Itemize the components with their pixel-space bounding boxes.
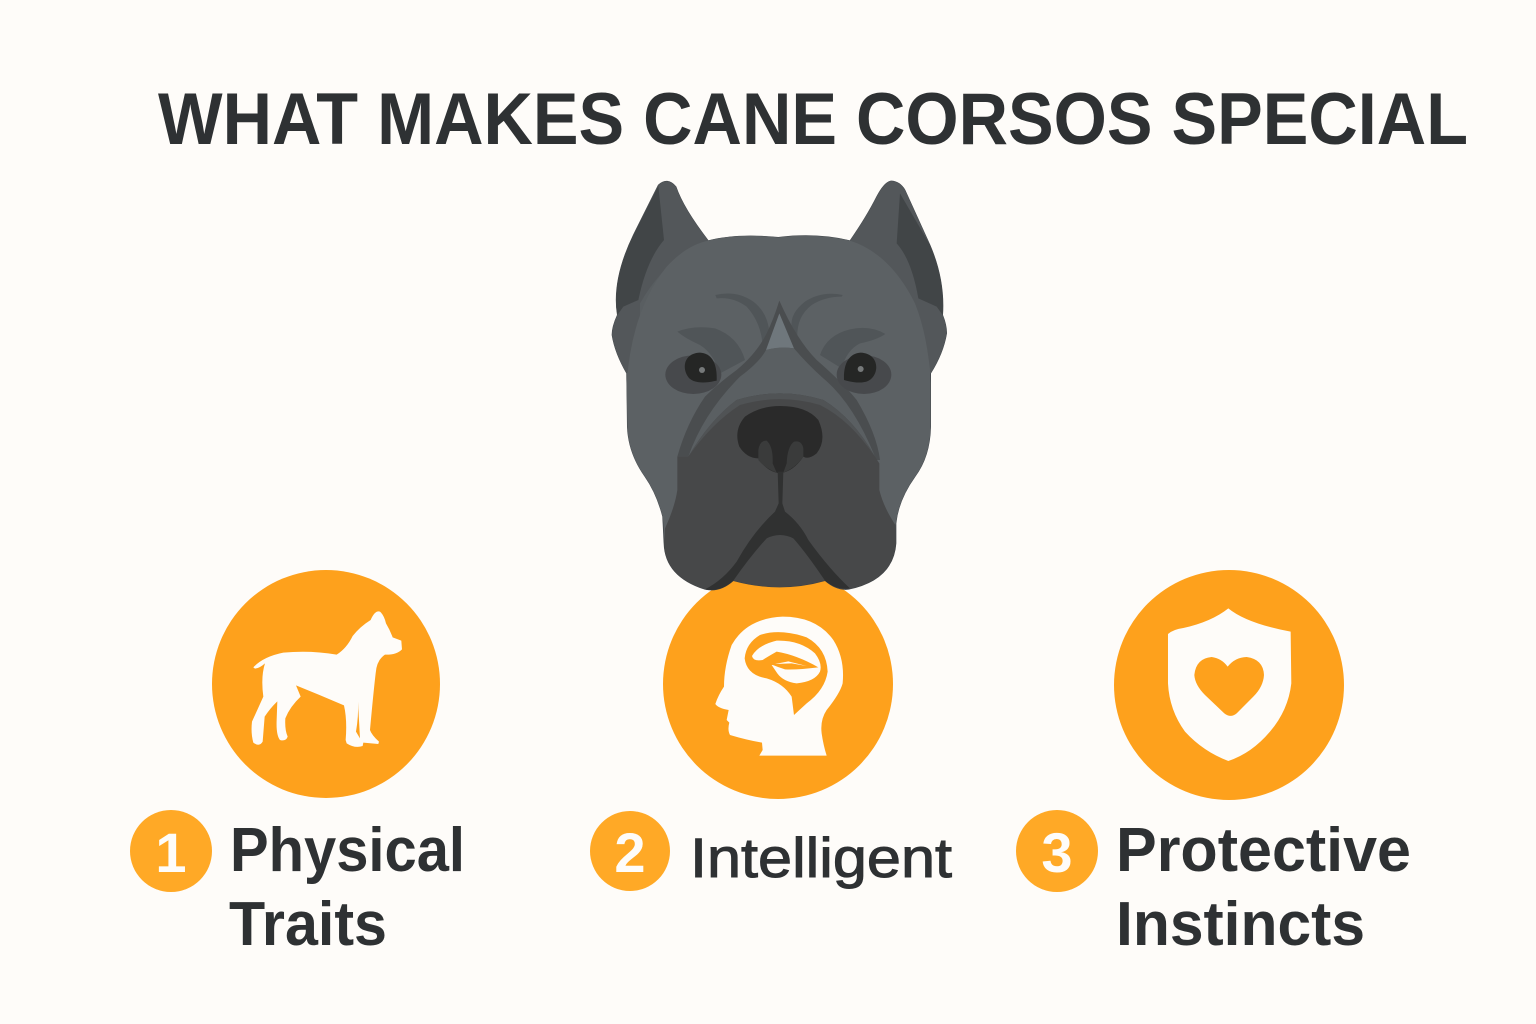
icon: brain head badge [663,569,893,799]
crease band [677,301,880,460]
step 1 label: Traits [229,890,387,959]
muzzle [664,393,896,590]
step 3 label: Protective [1116,816,1411,885]
step 2 label: Intelligent [690,826,952,889]
step 2 label [590,811,952,891]
icon: shield with heart badge [1114,570,1344,800]
title: WHAT MAKES CANE CORSOS SPECIAL [158,79,1468,160]
nose [737,406,822,473]
philtrum and mouth [705,472,850,590]
head base [612,181,947,590]
nose bridge [688,347,875,457]
forehead triangle [766,313,794,350]
step 3 label [1016,810,1411,959]
step 1 label [130,810,465,959]
step 1 label: Physical [230,816,465,885]
brow wrinkles [677,293,885,373]
illustration: cane corso head [612,181,947,590]
muzzle arc [688,393,875,457]
eye sockets [665,355,891,394]
step 3 label: 3 [1041,821,1073,884]
icon: dog silhouette badge [212,570,440,798]
step 1 label: 1 [155,821,187,884]
eyes [685,353,876,383]
step 3 label: Instincts [1116,890,1365,959]
ears [612,181,947,373]
step 2 label: 2 [614,821,646,884]
skull [627,236,931,527]
